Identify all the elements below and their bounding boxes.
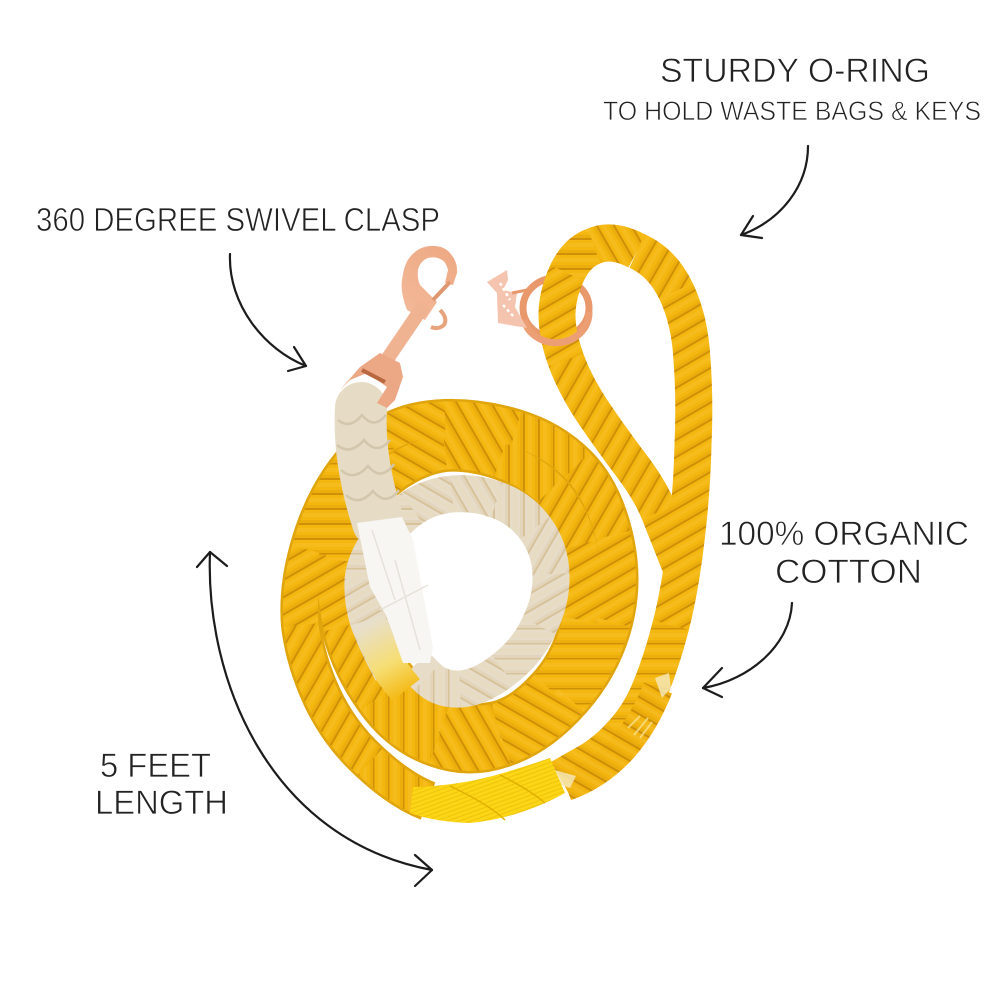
tag: dog-shaped charm [487, 270, 532, 328]
clasp: rose gold swivel snap hook [340, 246, 457, 408]
rope: yellow spiral coils [300, 419, 618, 801]
heading: length callout: LENGTH [95, 784, 228, 822]
arrow: to o-ring [741, 146, 808, 238]
leash illustration [300, 243, 694, 823]
heading: organic cotton callout [719, 515, 969, 591]
o-ring back [523, 278, 589, 338]
arrow: to cotton rope [703, 603, 792, 697]
rope: spliced tail with pale streaks [555, 673, 671, 788]
heading: swivel clasp callout: 360 DEGREE SWIVEL CLASP [36, 201, 440, 238]
arrow: double-headed length [197, 552, 432, 886]
arrow: to swivel clasp [230, 254, 306, 371]
rope: cream to yellow dye fade [368, 620, 406, 690]
heading: organic cotton callout: 100% ORGANIC [719, 515, 969, 553]
rope: handle main strand [560, 251, 694, 778]
heading: length callout [95, 747, 228, 822]
rope: cream braided splice [337, 408, 399, 522]
heading: sturdy o-ring callout [603, 52, 981, 126]
o-ring front [524, 312, 589, 343]
rope: yellow thread wrap [410, 758, 565, 823]
rope: handle return strand [557, 243, 682, 570]
rope: cream inner loop [363, 494, 551, 689]
rope: white fabric wrap [357, 517, 433, 663]
heading: sturdy o-ring callout: STURDY O-RING [660, 52, 930, 90]
heading: length callout: 5 FEET [100, 747, 211, 785]
heading: organic cotton callout: COTTON [775, 553, 922, 591]
